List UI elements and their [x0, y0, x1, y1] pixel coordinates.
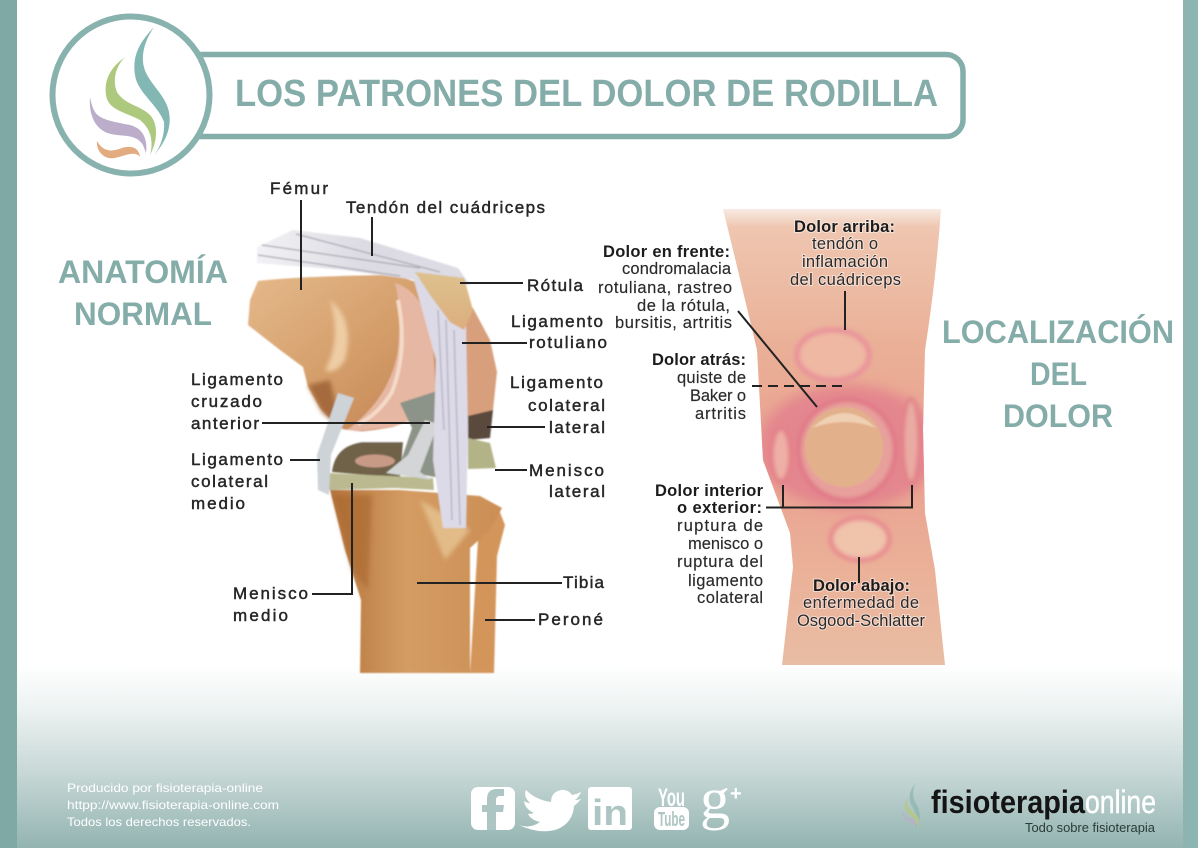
callout: dolor interior o exterior: o exterior:	[677, 499, 762, 517]
label: ligamento cruzado anterior: Ligamento	[191, 370, 283, 389]
icon: youtube: You	[658, 784, 685, 812]
label: tendón del cuádriceps: Tendón del cuádriceps	[346, 198, 545, 217]
label: ligamento rotuliano: Ligamento	[511, 312, 603, 331]
callout: dolor arriba: Dolor arriba:	[794, 218, 895, 236]
icon: google plus: g	[700, 766, 730, 831]
tagline: Todo sobre fisioterapia	[1025, 820, 1156, 835]
label: menisco medio: medio	[233, 606, 288, 625]
heading: localización del dolor: DEL	[1030, 356, 1087, 392]
quadriceps tendon	[257, 230, 470, 285]
tibia	[330, 490, 502, 673]
femur highlight	[325, 300, 348, 371]
heading: anatomía normal	[58, 254, 228, 332]
leader: dolor atrás (dashed)	[752, 385, 848, 387]
banner frame	[170, 54, 963, 136]
callout: dolor abajo: enfermedad de	[803, 594, 919, 612]
callout: dolor arriba	[790, 218, 901, 289]
panel: normal knee anatomy	[191, 179, 607, 673]
fibula	[470, 505, 505, 673]
callout: dolor interior o exterior: ruptura del	[677, 553, 763, 571]
leader: dolor abajo	[858, 557, 860, 583]
wordmark: fisioterapia	[931, 784, 1085, 820]
heading: anatomía normal: ANATOMÍA	[58, 254, 228, 290]
icon: google plus	[700, 766, 742, 831]
callout: dolor interior o exterior: colateral	[697, 589, 763, 607]
logo: circular flame emblem	[52, 16, 210, 174]
icon: youtube	[654, 784, 689, 831]
callout: dolor en frente	[598, 243, 732, 332]
leader: tendón	[371, 217, 373, 256]
callout: dolor interior o exterior	[655, 482, 764, 607]
label: menisco lateral: lateral	[549, 482, 605, 501]
icon: facebook	[471, 787, 515, 830]
icon: google plus: +	[730, 783, 742, 805]
label: menisco lateral: Menisco	[529, 461, 604, 480]
label: tibia: Tibia	[563, 573, 605, 592]
lateral femoral condyle	[450, 300, 497, 432]
leader: peroné	[485, 619, 535, 621]
heading: localización del dolor: LOCALIZACIÓN	[942, 314, 1174, 350]
label: ligamento colateral medio: colateral	[191, 472, 268, 491]
patella shape	[805, 407, 883, 487]
leader: menisco medio	[312, 483, 352, 594]
label: ligamento colateral lateral	[510, 373, 605, 437]
footer credits: Producido por fisioterapia-online	[67, 781, 263, 795]
lateral meniscus	[468, 438, 496, 469]
callout: dolor interior o exterior: ligamento	[688, 572, 763, 590]
social icons	[471, 766, 742, 833]
illustration: leg with pain zones	[723, 209, 945, 665]
label: ligamento colateral medio: medio	[191, 494, 245, 513]
wordmark: online	[1085, 784, 1156, 820]
femur shadow	[308, 380, 342, 430]
icon: small flame	[902, 783, 920, 830]
leader: fémur	[300, 200, 302, 290]
leader: dolor interior o exterior bracket	[766, 485, 912, 508]
callout: dolor atrás: artritis	[695, 405, 746, 423]
title: LOS PATRONES DEL DOLOR DE RODILLA	[235, 73, 938, 115]
callout: dolor en frente: Dolor en frente:	[603, 243, 730, 261]
callout: dolor arriba: inflamación	[802, 253, 888, 271]
callout: dolor arriba: tendón o	[812, 235, 878, 253]
anterior cruciate ligament	[386, 420, 438, 480]
callout: dolor atrás: quiste de	[677, 369, 746, 387]
leader: dolor en frente	[738, 311, 817, 407]
label: ligamento rotuliano: rotuliano	[529, 333, 607, 352]
icon: linkedin	[588, 787, 632, 833]
callout: dolor atrás: Dolor atrás:	[652, 351, 746, 369]
footer gradient band	[0, 664, 1198, 848]
title banner	[170, 54, 963, 136]
patellar ring	[799, 400, 895, 500]
label: menisco medio	[233, 584, 308, 625]
callout: dolor interior o exterior: Dolor interior	[655, 482, 764, 500]
patella highlight	[812, 413, 876, 428]
medial meniscus	[328, 473, 434, 490]
callout: dolor abajo: Osgood-Schlatter	[797, 612, 926, 630]
footer brand logo	[902, 783, 1156, 835]
callout: dolor abajo: Dolor abajo:	[813, 577, 910, 595]
label: rótula: Rótula	[527, 276, 584, 295]
lower zone ring	[831, 518, 889, 560]
femoral cartilage	[343, 283, 437, 433]
callout: dolor atrás	[652, 351, 746, 423]
meniscus plate	[332, 442, 403, 478]
callout: dolor en frente: bursitis, artritis	[615, 314, 732, 332]
callout: dolor abajo	[797, 577, 926, 630]
right side bar	[1183, 0, 1198, 848]
label: ligamento colateral lateral: colateral	[528, 396, 605, 415]
callout: dolor interior o exterior: menisco o	[688, 535, 763, 553]
leader: colateral lateral	[487, 426, 545, 428]
label: menisco medio: Menisco	[233, 584, 308, 603]
label: fémur: Fémur	[270, 179, 328, 198]
label: ligamento rotuliano	[511, 312, 607, 352]
patella	[415, 272, 473, 330]
femur	[248, 275, 450, 433]
leader: cruzado anterior	[262, 422, 430, 424]
upper zone ring	[797, 330, 869, 380]
tibia highlight	[420, 500, 470, 560]
label: ligamento colateral medio: Ligamento	[191, 450, 283, 469]
label: menisco lateral	[529, 461, 605, 501]
patellar tendon	[413, 277, 468, 528]
leader: colateral medio	[290, 459, 320, 461]
bracket left tick	[782, 485, 784, 507]
callout: dolor en frente: rotuliana, rastreo	[598, 279, 732, 297]
icon: twitter	[519, 790, 581, 831]
heading: anatomía normal: NORMAL	[74, 296, 212, 332]
callout: dolor en frente: condromalacia	[622, 260, 732, 278]
callout: dolor atrás: Baker o	[690, 387, 746, 405]
leader: ligamento rotuliano	[462, 342, 527, 344]
heading: localización del dolor: DOLOR	[1003, 398, 1113, 434]
leg silhouette	[723, 209, 945, 665]
leader: rótula	[460, 282, 523, 284]
panel: pain locations on knee	[598, 209, 945, 665]
label: peroné: Peroné	[538, 610, 603, 629]
callout: dolor interior o exterior: ruptura de	[677, 517, 763, 535]
leader: dolor arriba	[844, 291, 846, 330]
icon: linkedin: in	[592, 792, 628, 833]
reddened area around knee	[758, 385, 938, 509]
label: ligamento cruzado anterior	[191, 370, 283, 433]
callout: dolor arriba: del cuádriceps	[790, 271, 901, 289]
heading: localización del dolor	[942, 314, 1174, 434]
medial oval	[772, 430, 790, 479]
lateral oval	[903, 399, 919, 483]
leader: tibia	[417, 582, 562, 584]
callout: dolor en frente: de la rótula,	[637, 297, 730, 315]
label: ligamento colateral medio	[191, 450, 283, 513]
label: ligamento cruzado anterior: anterior	[191, 414, 259, 433]
tibia shadow	[333, 495, 372, 590]
footer credits	[67, 781, 279, 829]
left side bar	[0, 0, 17, 848]
leader: menisco lateral	[495, 469, 527, 471]
icon: youtube: Tube	[658, 809, 685, 831]
label: ligamento colateral lateral: lateral	[549, 418, 605, 437]
joint gap	[398, 390, 440, 478]
medial collateral ligament	[317, 393, 354, 495]
pain zones	[758, 330, 938, 560]
footer credits: Todos los derechos reservados.	[67, 815, 251, 829]
label: ligamento colateral lateral: Ligamento	[510, 373, 603, 392]
illustration: knee joint	[248, 230, 505, 673]
footer credits: httpp://www.fisioterapia-online.com	[67, 798, 279, 812]
label: ligamento cruzado anterior: cruzado	[191, 392, 262, 411]
